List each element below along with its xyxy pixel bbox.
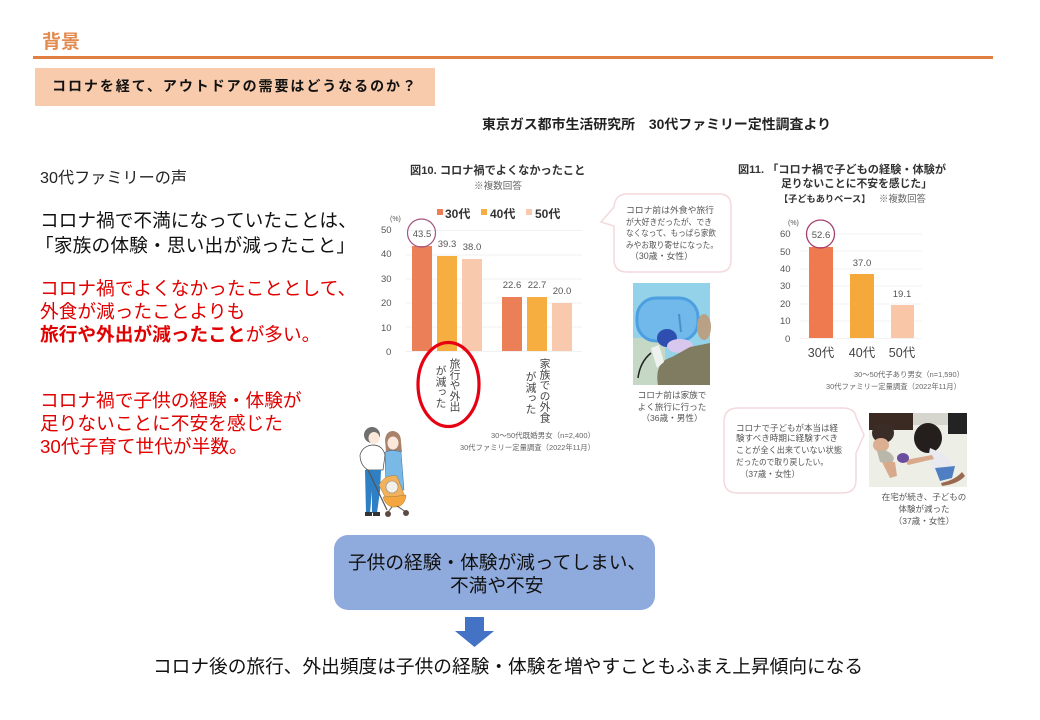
photo caption <box>638 389 706 423</box>
dissatisfaction text <box>35 210 357 256</box>
photo caption: （37歳・女性） <box>894 516 954 526</box>
bar values: 39.3 <box>438 239 456 250</box>
bar values <box>413 229 571 297</box>
bars <box>412 246 572 351</box>
axis: (%) <box>390 216 401 223</box>
voices label: 30代ファミリーの声 <box>40 169 187 187</box>
bar values: 43.5 <box>413 229 431 240</box>
bars <box>809 247 914 338</box>
axis: 20 <box>780 299 791 310</box>
red text: travel decreased: コロナ禍でよくなかったこととして、 <box>40 278 356 299</box>
arrow: down <box>455 617 494 647</box>
man <box>364 427 380 443</box>
chart notes: 30代ファミリー定量調査（2022年11月） <box>826 381 961 391</box>
chart: figure 11: ※複数回答 <box>879 193 927 204</box>
photo caption: （36歳・男性） <box>641 412 703 423</box>
chart notes <box>826 369 964 391</box>
red text: travel decreased <box>40 278 356 345</box>
chart title: 【子どもありベース】 <box>779 193 870 204</box>
chart notes: 30代ファミリー定量調査（2022年11月） <box>460 442 595 452</box>
highlight circle <box>806 220 834 248</box>
title: 背景 <box>42 31 80 53</box>
category labels: 旅行や外出 <box>448 358 460 412</box>
bar values: 19.1 <box>893 289 911 300</box>
speech bubble: 37 woman <box>724 408 864 493</box>
photo caption: よく旅行に行った <box>638 401 706 412</box>
chart notes: 30～50代既婚男女（n=2,400） <box>491 430 595 440</box>
callout: summary box <box>334 535 655 610</box>
photo: children at home <box>869 413 967 487</box>
axis: 10 <box>780 316 791 327</box>
bar values: 38.0 <box>463 242 481 253</box>
axis: 30 <box>780 281 791 292</box>
subtitle banner <box>35 68 435 106</box>
category labels <box>808 346 916 360</box>
speech bubble: 30s woman: みやお取り寄せになった。 <box>626 239 718 250</box>
category labels: 40代 <box>849 346 876 360</box>
chart title: 図11. 「コロナ禍で子どもの経験・体験が <box>738 162 946 176</box>
stroller <box>368 470 387 510</box>
bar values: 52.6 <box>812 230 830 241</box>
category labels <box>434 357 550 423</box>
axis: 40 <box>780 264 791 275</box>
speech bubble: 37 woman: コロナで子どもが本当は経 <box>736 422 838 433</box>
legend: 50代 <box>535 207 560 221</box>
axis: 0 <box>386 347 391 358</box>
category labels: 30代 <box>808 346 835 360</box>
chart: figure 10: ※複数回答 <box>474 180 522 192</box>
axis: 10 <box>381 323 392 334</box>
callout: summary box: 不満や不安 <box>450 575 543 596</box>
red ellipse highlight <box>418 342 479 426</box>
photo caption: 在宅が続き、子どもの <box>882 492 966 502</box>
woman <box>385 431 402 452</box>
axis: 60 <box>780 229 791 240</box>
photo caption: コロナ前は家族で <box>638 389 706 400</box>
chart notes <box>460 430 595 452</box>
axis: (%) <box>788 220 799 227</box>
axis: 50 <box>381 225 392 236</box>
chart notes: 30～50代子あり男女（n=1,590） <box>854 369 964 379</box>
highlight circle <box>408 219 436 247</box>
illustration: family with stroller <box>360 427 409 517</box>
axis <box>780 220 799 345</box>
legend: 30代 <box>445 207 470 221</box>
speech bubble: 37 woman: （37歳・女性） <box>740 468 800 479</box>
bar values: 20.0 <box>553 286 571 297</box>
speech bubble: 30s woman: コロナ前は外食や旅行 <box>626 204 714 215</box>
bar values <box>812 230 911 300</box>
red text: child experience anxiety: コロナ禍で子供の経験・体験が <box>40 390 302 411</box>
legend: 40代 <box>490 207 515 221</box>
axis: 0 <box>785 334 790 345</box>
source note: 東京ガス都市生活研究所 30代ファミリー定性調査より <box>482 116 831 132</box>
axis: 20 <box>381 298 392 309</box>
speech bubble: 37 woman: ことが全く出来ていない状態 <box>736 444 842 455</box>
red text: child experience anxiety <box>40 390 302 457</box>
legend <box>437 207 560 221</box>
red text: travel decreased: 旅行や外出が減ったことが多い。 <box>40 324 320 345</box>
chart title <box>738 162 946 204</box>
dissatisfaction text: 「家族の体験・思い出が減ったこと」 <box>35 235 355 256</box>
speech bubble: 37 woman: だったので取り戻したい。 <box>736 457 828 467</box>
speech bubble: 30s woman: が大好きだったが、でき <box>626 216 712 227</box>
photo caption: 体験が減った <box>898 504 950 514</box>
chart title: 足りないことに不安を感じた」 <box>781 176 932 190</box>
red text: child experience anxiety: 足りないことに不安を感じた <box>40 413 283 434</box>
chart: figure 10 <box>381 163 595 452</box>
bar values: 37.0 <box>853 258 871 269</box>
callout: summary box: 子供の経験・体験が減ってしまい、 <box>348 552 646 573</box>
photo caption <box>882 492 966 526</box>
chart title: 図10. コロナ禍でよくなかったこと <box>410 163 585 177</box>
speech bubble: 30s woman <box>601 194 731 272</box>
axis: 40 <box>381 249 392 260</box>
speech bubble: 30s woman: なくなって、もっぱら家飲 <box>626 227 716 238</box>
axis: 50 <box>780 247 791 258</box>
red text: child experience anxiety: 30代子育て世代が半数。 <box>40 436 248 457</box>
category labels: が減った <box>524 371 536 414</box>
left column: family voices <box>35 169 357 457</box>
speech bubble: 30s woman: （30歳・女性） <box>630 250 693 261</box>
dissatisfaction text: コロナ禍で不満になっていたことは、 <box>40 210 357 231</box>
category labels: 50代 <box>889 346 916 360</box>
speech bubble: 37 woman: 験すべき時期に経験すべき <box>736 432 838 443</box>
red text: travel decreased: 外食が減ったことよりも <box>40 301 245 322</box>
axis: 30 <box>381 274 392 285</box>
bar values: 22.6 <box>503 280 521 291</box>
axis <box>381 216 401 358</box>
subtitle banner: コロナを経て、アウトドアの需要はどうなるのか？ <box>52 78 416 94</box>
bar values: 22.7 <box>528 280 546 291</box>
category labels: が減った <box>434 365 446 408</box>
category labels: 家族での外食 <box>538 357 550 423</box>
chart: figure 11 <box>738 162 964 391</box>
conclusion text: コロナ後の旅行、外出頻度は子供の経験・体験を増やすこともふまえ上昇傾向になる <box>153 656 863 677</box>
photo: family at aquarium <box>633 283 711 385</box>
